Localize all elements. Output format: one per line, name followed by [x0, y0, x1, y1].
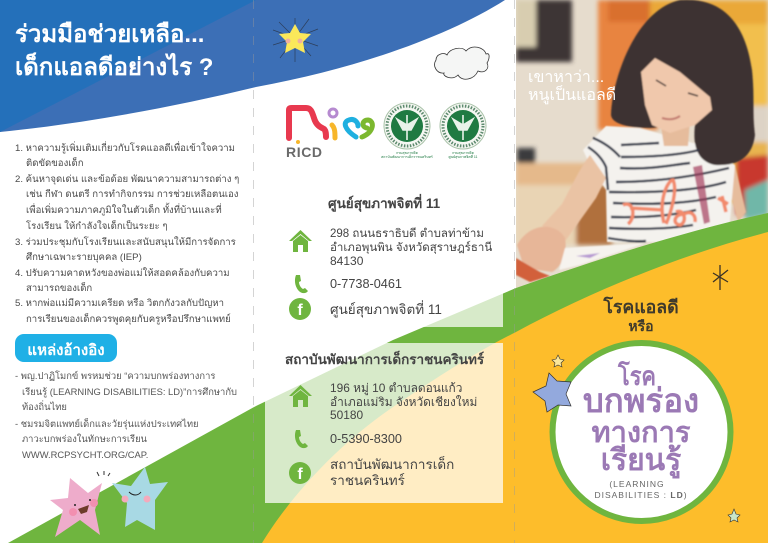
text block: advice list: 4. ปรับความคาดหวังของพ่อแม่ให้สอดคล้องกับความ — [15, 267, 230, 279]
heading: references badge: แหล่งอ้างอิง — [27, 341, 105, 359]
panel: yellow area — [262, 232, 768, 543]
text: address: อำเภอพุนพิน จังหวัดสุราษฎร์ธานี — [330, 240, 492, 254]
text: facebook name: สถาบันพัฒนาการเด็ก — [330, 455, 454, 472]
icon: phone — [295, 275, 308, 293]
text: address: อำเภอแม่ริม จังหวัดเชียงใหม่ — [330, 395, 477, 409]
panel: contact box 1 — [265, 186, 503, 327]
text block: references: ท้องถิ่นไทย — [22, 400, 67, 412]
heading: institute: สถาบันพัฒนาการเด็กราชนครินทร์ — [285, 350, 485, 367]
title: ร่วมมือช่วยเหลือ... — [15, 21, 204, 48]
text: LD title: โรค — [617, 360, 656, 391]
text: address: 50180 — [330, 408, 363, 422]
title: เด็กแอลดีอย่างไร ? — [15, 52, 213, 81]
icon: facebook: f — [297, 466, 303, 483]
icon: home — [289, 385, 312, 407]
text block: references: - พญ.ปาฏิโมกข์ พรหมช่วย “ความบกพร่องทางการ — [15, 370, 215, 381]
icon: facebook: f — [297, 302, 303, 319]
logo: ministry seal 1: กรมสุขภาพจิต — [396, 151, 419, 156]
icon: periwinkle star — [533, 373, 571, 412]
heading: LD or: โรคแอลดี — [602, 296, 679, 317]
logo: RICD: RICD — [286, 144, 323, 160]
text: english: (LEARNING — [609, 479, 665, 489]
icon: yellow star — [273, 18, 318, 62]
icon: small green star — [728, 509, 740, 522]
text block: references: - ชมรมจิตแพทย์เด็กและวัยรุ่นแห่งประเทศไทย — [15, 417, 198, 430]
icon: facebook — [289, 462, 311, 484]
panel: blue header shape — [0, 0, 505, 132]
text: LD title: เรียนรู้ — [601, 444, 681, 479]
logo: ministry seal 1: สถาบันพัฒนาการเด็กราชนครินทร์ — [381, 153, 433, 159]
heading: LD or: หรือ — [628, 318, 654, 334]
heading: LD or — [602, 296, 679, 334]
text: english: DISABILITIES : LD) — [594, 490, 688, 500]
text block: references: WWW.RCPSYCHT.ORG/CAP. — [22, 449, 148, 460]
text: photo caption: หนูเป็นแอลดี — [528, 84, 616, 105]
icon: pink star — [50, 471, 110, 537]
logo: ministry seal 2 — [440, 103, 486, 160]
heading: center 11: ศูนย์สุขภาพจิตที่ 11 — [328, 193, 441, 212]
text block: references: ภาวะบกพร่องในทักษะการเรียน — [22, 433, 148, 444]
text: LD title: ทางการ — [592, 417, 691, 449]
logo: RICD — [286, 108, 372, 160]
text: address: 298 ถนนธราธิบดี ตำบลท่าข้าม — [330, 227, 484, 240]
text: facebook name: ราชนครินทร์ — [330, 472, 405, 488]
text: phone: 0-5390-8300 — [330, 432, 402, 446]
fold lines — [254, 0, 514, 543]
text: LD title: บกพร่อง — [583, 382, 699, 419]
text block: advice list: 1. หาความรู้เพิ่มเติมเกี่ยวกับโรคแอลดีเพื่อเข้าใจความ — [15, 141, 235, 154]
text block: advice list: เช่น กีฬา ดนตรี การทำกิจกรรม การช่วยเหลือตนเอง — [26, 188, 238, 200]
text block: advice list: การเรียนของเด็กควรพูดคุยกับครูหรือปรึกษาแพทย์ — [26, 312, 231, 325]
text block: advice list: ศึกษาเฉพาะรายบุคคล (IEP) — [26, 252, 142, 263]
icon: cloud — [435, 47, 489, 79]
logo: ministry seal 2: กรมสุขภาพจิต — [452, 151, 475, 156]
text block: advice list: เพื่อเพิ่มความภาคภูมิใจในตัวเด็ก ทั้งที่บ้านและที่ — [26, 202, 222, 216]
circle badge — [552, 343, 730, 521]
icon: asterisk doodle — [713, 265, 728, 290]
text: facebook name: ศูนย์สุขภาพจิตที่ 11 — [330, 300, 442, 318]
text block: advice list: 3. ร่วมประชุมกับโรงเรียนและสนับสนุนให้มีการจัดการ — [15, 236, 236, 248]
panel: photo of girl drawing — [516, 0, 768, 300]
icon: blue star — [112, 467, 168, 530]
text: address: 196 หมู่ 10 ตำบลดอนแก้ว — [330, 381, 462, 396]
icon: small yellow star — [552, 355, 564, 367]
heading: references badge — [15, 334, 117, 362]
icon: phone — [295, 430, 308, 448]
text block: advice list: โรงเรียน ให้กำลังใจเด็กเป็นระยะ ๆ — [26, 219, 168, 232]
text block: advice list: 5. หากพ่อแม่มีความเครียด หรือ วิตกกังวลกับปัญหา — [15, 297, 224, 309]
text block: advice list: 2. ค้นหาจุดเด่น และข้อด้อย พัฒนาความสามารถต่าง ๆ — [15, 174, 239, 185]
text: photo caption: เขาหาว่า... — [528, 69, 604, 86]
icon: home — [289, 230, 312, 252]
icon: facebook — [289, 298, 311, 320]
text: address: 84130 — [330, 254, 364, 268]
text block: references: เรียนรู้ (LEARNING DISABILITIES: LD)”การศึกษากับ — [22, 386, 237, 398]
text: phone: 0-7738-0461 — [330, 277, 402, 291]
logo: ministry seal 1 — [381, 103, 433, 159]
text: LD title — [583, 360, 699, 479]
panel: contact box 2 — [265, 343, 503, 503]
logo: ministry seal 2: ศูนย์สุขภาพจิตที่ 11 — [448, 154, 478, 160]
panel: green band — [8, 213, 768, 543]
text block: advice list: สามารถของเด็ก — [26, 281, 92, 294]
text block: advice list: ติดขัดของเด็ก — [26, 156, 84, 169]
girl — [516, 0, 755, 282]
